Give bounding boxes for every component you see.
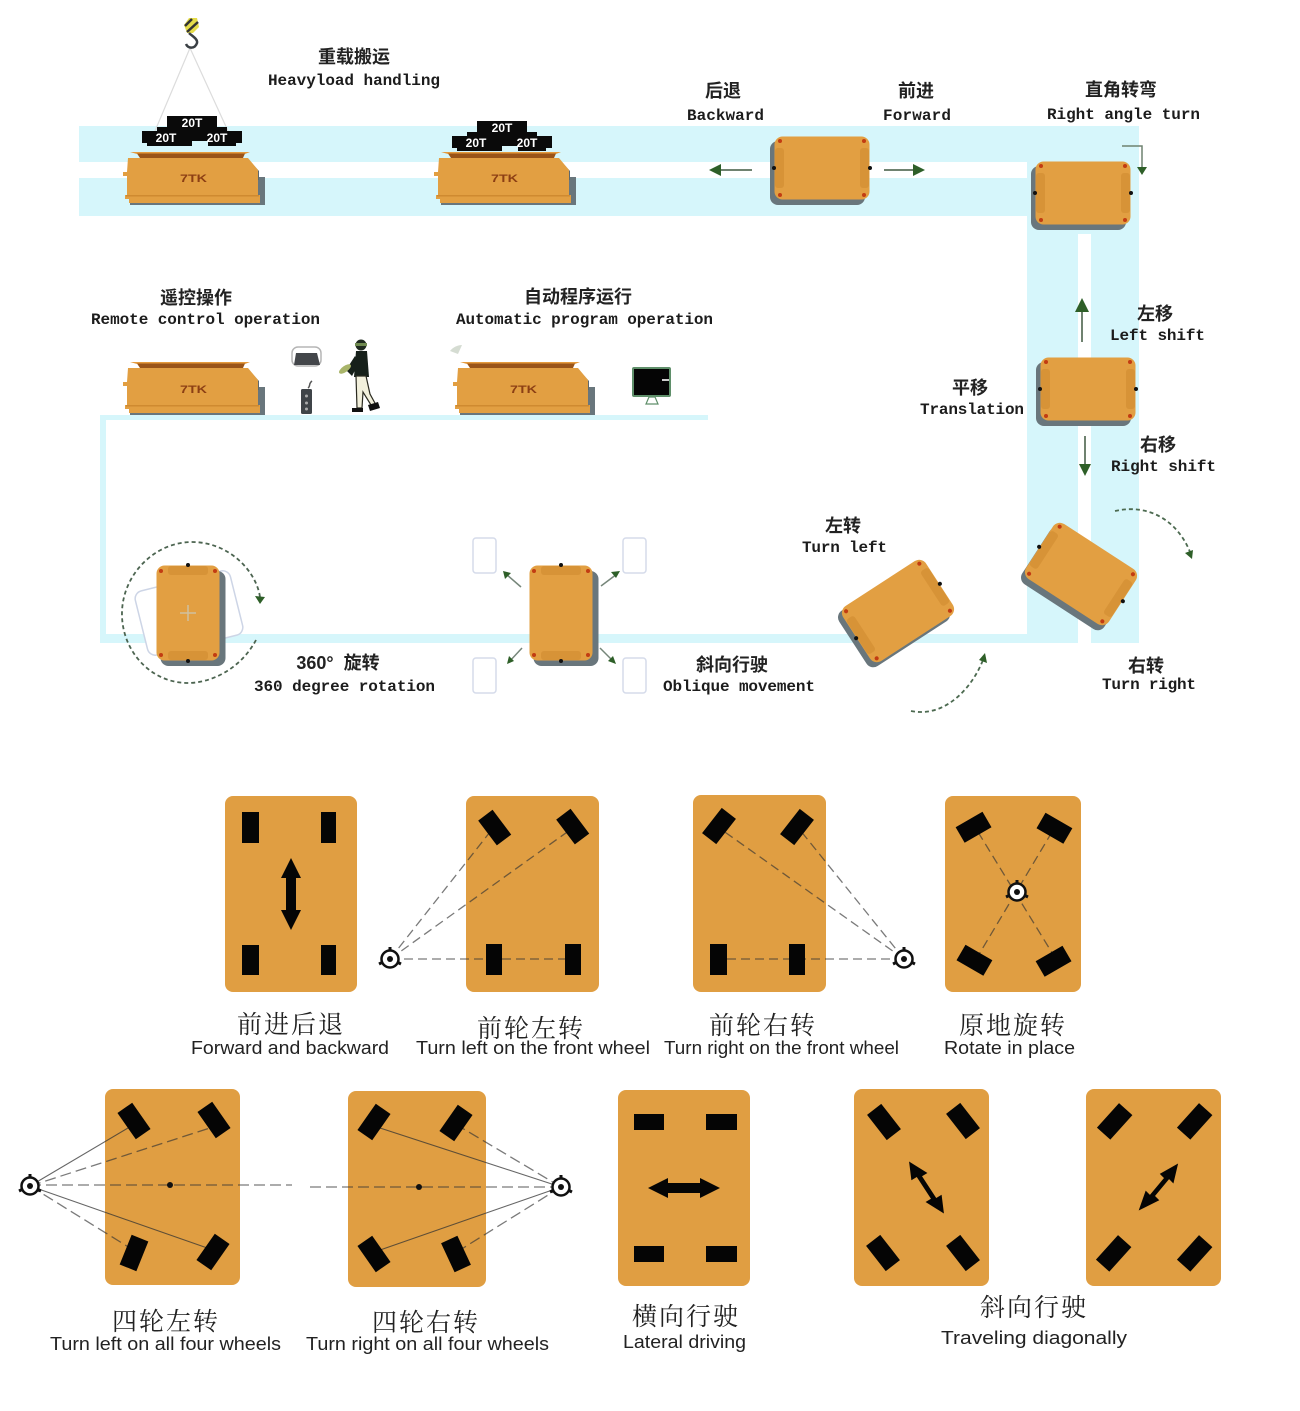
AGV top view: turn right <box>1018 518 1142 633</box>
load blocks: three 20T landed: 20T <box>492 121 513 135</box>
icon: remote receiver <box>292 347 321 366</box>
label: 360 degree rotation <box>254 653 435 696</box>
label: oblique movement: 斜向行驶 <box>696 655 768 675</box>
caption: rotate in place <box>944 1012 1075 1058</box>
load blocks: three 20T on crane: 20T <box>182 116 203 130</box>
label: right angle turn <box>1047 79 1200 124</box>
heavy load AGV on crane: 7TK <box>180 173 207 185</box>
label: turn right: Turn right <box>1102 676 1196 694</box>
label: left shift: 左移 <box>1137 304 1173 324</box>
AGV side view: automatic program: 7TK <box>510 384 537 396</box>
label: remote control operation: 遥控操作 <box>160 287 232 308</box>
caption: forward and backward: 前进后退 <box>237 1011 345 1039</box>
load blocks: three 20T on crane: 20T <box>207 131 228 145</box>
label: backward: 后退 <box>705 81 741 101</box>
load blocks: three 20T landed: 20T <box>517 136 538 150</box>
caption: turn left on the front wheel: Turn left on the front wheel <box>416 1037 650 1058</box>
AGV top view: turn left <box>835 555 959 670</box>
label: 360 degree rotation: 360 degree rotation <box>254 678 435 696</box>
label: right angle turn: Right angle turn <box>1047 106 1200 124</box>
AGV side view: remote control: 7TK <box>180 384 207 396</box>
caption: rotate in place: 原地旋转 <box>959 1012 1067 1040</box>
caption: turn left on all four wheels: 四轮左转 <box>112 1308 220 1336</box>
icon: wireless signal <box>450 345 462 354</box>
arrow: right shift <box>1079 436 1091 476</box>
label: turn left: Turn left <box>802 539 887 557</box>
label: translation: Translation <box>920 401 1024 419</box>
label: right shift: 右移 <box>1140 435 1176 455</box>
heavy load AGV landed: 7TK <box>491 173 518 185</box>
label: translation <box>920 378 1024 419</box>
AGV side view: automatic program <box>453 362 595 415</box>
heavy load AGV landed <box>434 152 576 205</box>
caption: traveling diagonally: 斜向行驶 <box>980 1294 1088 1322</box>
caption: turn right on the front wheel: 前轮右转 <box>709 1012 817 1040</box>
arrow: right angle turn <box>1122 146 1147 175</box>
panel: forward and backward <box>225 796 357 992</box>
label: right shift <box>1111 435 1216 476</box>
arrow: 360 rotation circle <box>122 542 265 683</box>
label: forward <box>883 81 951 125</box>
label: turn right: 右转 <box>1128 656 1164 676</box>
heavy load AGV on crane <box>123 152 265 205</box>
label: backward <box>687 81 764 125</box>
load blocks: three 20T landed <box>452 121 552 151</box>
caption: traveling diagonally: Traveling diagonally <box>941 1327 1128 1348</box>
label: translation: 平移 <box>952 378 988 398</box>
track: light blue guide path <box>79 126 1139 643</box>
caption: turn right on all four wheels: Turn right on all four wheels <box>306 1333 549 1354</box>
label: heavyload handling <box>268 46 440 90</box>
panel: turn right on the front wheel <box>693 795 915 992</box>
caption: forward and backward: Forward and backward <box>191 1037 389 1058</box>
arrow: turn right curve <box>1115 509 1193 559</box>
caption: lateral driving: 横向行驶 <box>632 1303 740 1331</box>
icon: computer monitor <box>633 368 670 404</box>
caption: turn left on the front wheel <box>416 1015 650 1058</box>
AGV top view: translation <box>1036 358 1138 426</box>
caption: turn right on the front wheel: Turn right on the front wheel <box>664 1037 899 1058</box>
label: oblique movement: Oblique movement <box>663 678 815 696</box>
label: remote control operation <box>91 287 320 329</box>
arrow: forward <box>884 164 925 176</box>
arrows: oblique movement <box>503 571 620 664</box>
caption: turn left on all four wheels: Turn left on all four wheels <box>50 1333 281 1354</box>
label: turn right <box>1102 656 1196 694</box>
ghost positions: oblique movement <box>473 538 646 693</box>
label: remote control operation: Remote control operation <box>91 311 320 329</box>
label: turn left <box>802 516 887 557</box>
AGV top view: oblique movement <box>530 563 598 666</box>
label: left shift: Left shift <box>1110 327 1205 345</box>
arrow: backward <box>709 164 752 176</box>
label: automatic program operation: Automatic program operation <box>456 311 713 329</box>
caption: turn right on all four wheels <box>306 1309 549 1354</box>
label: heavyload handling: 重载搬运 <box>318 46 390 67</box>
panel: turn left on all four wheels <box>19 1089 292 1285</box>
caption: rotate in place: Rotate in place <box>944 1037 1075 1058</box>
AGV top view: right angle turn <box>1031 162 1133 230</box>
label: 360 degree rotation: 360° 旋转 <box>296 653 380 673</box>
label: right shift: Right shift <box>1111 458 1216 476</box>
label: turn left: 左转 <box>825 516 861 536</box>
caption: lateral driving: Lateral driving <box>623 1331 746 1352</box>
label: automatic program operation: 自动程序运行 <box>524 286 632 307</box>
label: right angle turn: 直角转弯 <box>1085 79 1157 100</box>
load blocks: three 20T on crane <box>142 116 242 146</box>
panel: turn left on the front wheel <box>379 796 599 992</box>
load blocks: three 20T on crane: 20T <box>156 131 177 145</box>
panel: turn right on all four wheels <box>306 1091 572 1287</box>
panel: rotate in place <box>945 796 1081 992</box>
caption: turn right on the front wheel <box>664 1012 899 1058</box>
caption: forward and backward <box>191 1011 389 1058</box>
AGV side view: remote control <box>123 362 265 415</box>
caption: turn left on the front wheel: 前轮左转 <box>477 1015 585 1043</box>
AGV top view: forward and backward <box>770 136 872 205</box>
label: left shift <box>1110 304 1205 345</box>
caption: turn left on all four wheels <box>50 1308 281 1354</box>
caption: turn right on all four wheels: 四轮右转 <box>372 1309 480 1337</box>
AGV top view: 360 degree rotation <box>133 563 245 666</box>
label: automatic program operation <box>456 286 713 329</box>
label: forward: Forward <box>883 107 951 125</box>
icon: operator figure <box>338 340 380 412</box>
panel: lateral driving <box>618 1090 750 1286</box>
icon: handheld remote <box>301 381 312 414</box>
load blocks: three 20T landed: 20T <box>466 136 487 150</box>
arrow: left shift <box>1075 298 1089 342</box>
label: oblique movement <box>663 655 815 696</box>
panel: traveling diagonally, right diagonal <box>1086 1089 1221 1286</box>
label: heavyload handling: Heavyload handling <box>268 72 440 90</box>
icon: crane hook and slings <box>155 18 228 131</box>
arrow: turn left curve <box>911 653 987 712</box>
caption: traveling diagonally <box>941 1294 1128 1348</box>
panel: traveling diagonally, left diagonal <box>854 1089 989 1286</box>
label: backward: Backward <box>687 107 764 125</box>
caption: lateral driving <box>623 1303 746 1352</box>
label: forward: 前进 <box>898 81 934 101</box>
